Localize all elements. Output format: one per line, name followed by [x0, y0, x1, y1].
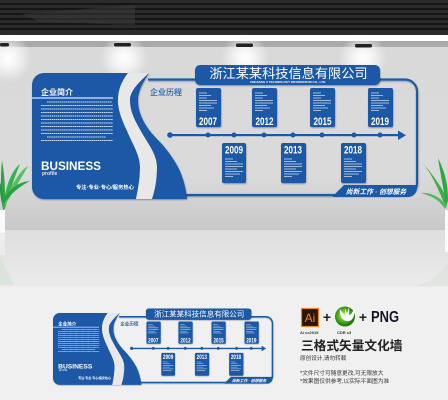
heading: company history: 企业历程 [150, 87, 182, 97]
slogan: 专注·专业·专心/服务热心 [76, 183, 135, 191]
thumbnail years: 2007 [148, 338, 159, 345]
thumbnail title bar [146, 308, 251, 320]
icon: Ai: Ai [305, 311, 315, 325]
thumbnail tag: 尚新工作 · 创想服务 [232, 378, 267, 383]
card text lines [199, 93, 389, 176]
notes: *效果图仅供参考,以实际平面图为准 [300, 377, 389, 385]
thumbnail history heading: 企业历程 [120, 321, 139, 328]
thumbnail profile text [58, 330, 99, 351]
thumbnail profile heading: 企业简介 [58, 321, 77, 328]
thumbnail tag [225, 377, 272, 384]
format heading: 三格式矢量文化墙 [301, 338, 403, 353]
card years: 2009 [225, 144, 243, 156]
profile text block [41, 102, 113, 140]
card years: 2019 [371, 116, 389, 128]
plus sign two: + [359, 309, 367, 325]
thumbnail title bar: 浙江某某科技信息有限公司 [154, 308, 244, 318]
left plant [0, 160, 30, 285]
icon: Ai [302, 308, 318, 326]
original design note: 原创设计,请勿转载 [300, 354, 347, 362]
thumbnail years: 2013 [197, 354, 207, 361]
card years: 2012 [256, 116, 274, 128]
thumbnail years: 2009 [163, 354, 174, 361]
thumbnail frame [119, 317, 272, 383]
thumbnail panel [53, 313, 141, 385]
card years [199, 116, 389, 156]
thumbnail years: 2012 [180, 338, 191, 345]
timeline [167, 130, 406, 140]
right plant [418, 158, 448, 286]
title bar: ZHEJIANG X TECHNOLOGY INFORMATION CO., LTD. [250, 80, 326, 84]
profile label: profile [42, 171, 57, 177]
thumbnail cards [146, 322, 259, 376]
title bar: 浙江某某科技信息有限公司 [209, 65, 368, 81]
card years: 2007 [199, 116, 217, 128]
thumbnail profile label: profile [59, 368, 68, 372]
panel: company profile [32, 73, 187, 199]
card years: 2013 [284, 144, 302, 156]
icon: CDR [335, 306, 355, 326]
spotlights [0, 34, 387, 82]
CDR version label: CDR x3 [337, 330, 352, 335]
thumbnail business heading: BUSINESS [58, 363, 93, 370]
thumbnail years: 2019 [246, 338, 257, 345]
culture wall: large view [32, 65, 417, 199]
PNG label: PNG [371, 309, 399, 326]
wall background [0, 35, 448, 231]
thumbnail years: 2018 [231, 354, 241, 361]
floor [0, 230, 448, 287]
bottom info band [0, 287, 448, 400]
culture wall: thumbnail [53, 308, 272, 385]
business heading: BUSINESS [41, 159, 101, 173]
ceiling: dark slats [0, 0, 448, 35]
notes: *文件尺寸可随意更改,可无限放大 [300, 369, 384, 377]
thumbnail years [148, 338, 257, 361]
frame line [148, 80, 417, 195]
thumbnail card lines [148, 324, 256, 371]
title bar [195, 65, 380, 85]
thumbnail timeline [130, 346, 266, 351]
card years: 2015 [314, 116, 332, 128]
bottom right tag [333, 185, 417, 197]
card years: 2018 [344, 144, 362, 156]
milestone cards [196, 88, 393, 183]
thumbnail slogan: 专注·专业·专心/服务热心 [78, 375, 111, 380]
plus sign one: + [323, 309, 331, 325]
heading: company profile: 企业简介 [41, 87, 73, 97]
Ai version label: Ai cc2015 [300, 330, 319, 335]
thumbnail years: 2015 [213, 338, 224, 345]
notes [300, 369, 389, 385]
bottom right tag: 尚新工作 · 创想服务 [346, 188, 407, 196]
